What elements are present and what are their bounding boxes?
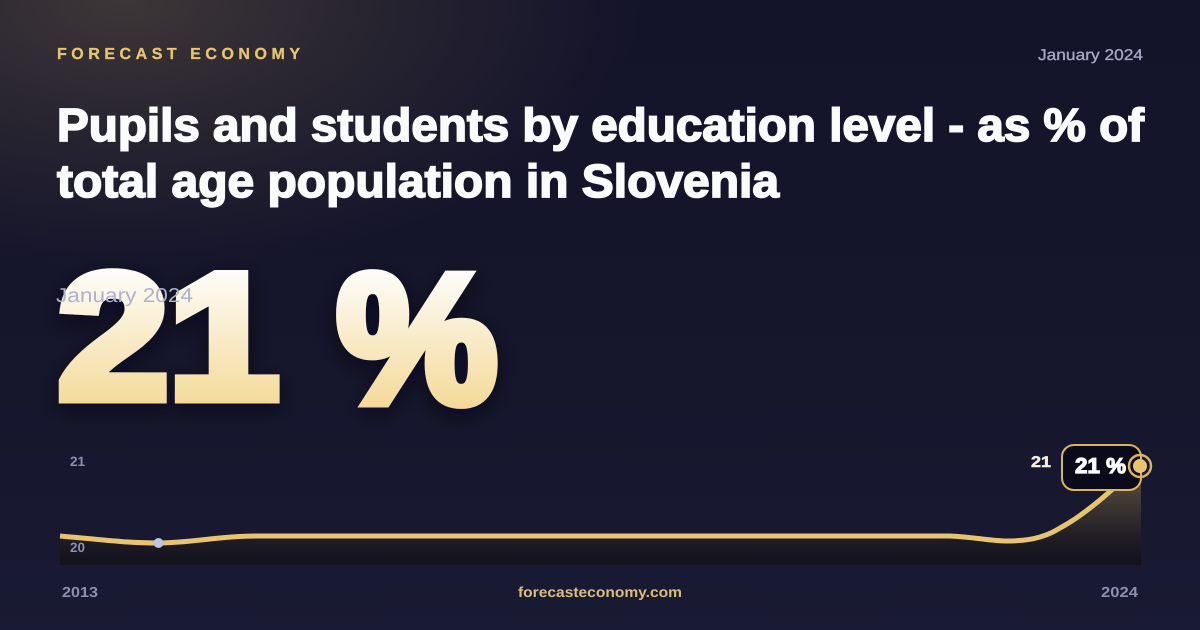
chart line	[60, 487, 1115, 543]
x axis label end: 2024	[1101, 585, 1138, 601]
date overlay on value: January 2024	[56, 285, 193, 307]
y axis label 21: 21	[70, 454, 86, 469]
chart area fill	[60, 466, 1141, 565]
start point marker	[154, 538, 164, 548]
callout: 21 %	[1075, 454, 1126, 478]
title: Pupils and students by education level - as % of	[57, 99, 1145, 151]
title	[57, 99, 1145, 207]
title: total age population in Slovenia	[57, 155, 780, 207]
big value: 21	[58, 237, 279, 436]
callout	[1062, 445, 1141, 490]
date top right: January 2024	[1038, 47, 1143, 64]
end point marker	[1129, 455, 1151, 477]
line chart	[60, 466, 1141, 565]
end value label: 21	[1031, 454, 1051, 471]
y axis label 20: 20	[70, 540, 85, 555]
x axis label start: 2013	[62, 585, 98, 601]
source link: forecasteconomy.com	[518, 585, 682, 601]
big value	[58, 236, 497, 441]
big value: %	[337, 236, 497, 441]
brand label: FORECAST ECONOMY	[57, 46, 300, 63]
